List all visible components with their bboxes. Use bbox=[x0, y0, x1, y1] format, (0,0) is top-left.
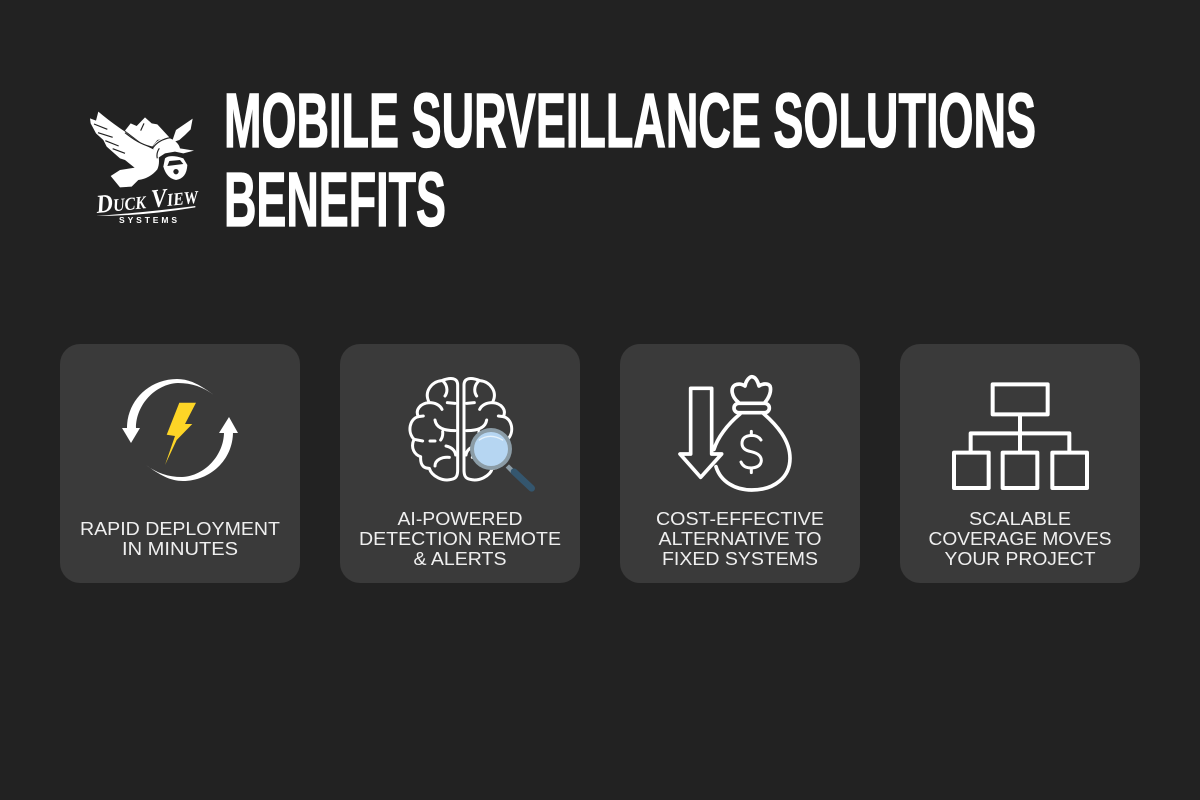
label: RAPID DEPLOYMENT bbox=[80, 518, 280, 539]
label: YOUR PROJECT bbox=[944, 548, 1096, 569]
icon: duck body bbox=[111, 150, 159, 187]
label: IN MINUTES bbox=[122, 538, 238, 559]
icon: hierarchy chart bbox=[954, 384, 1087, 488]
icon: duck right wing bbox=[172, 119, 193, 143]
label: & ALERTS bbox=[414, 548, 506, 569]
panel: cost-effective bbox=[620, 344, 860, 583]
title: BENEFITS bbox=[224, 157, 446, 243]
icon: duck left wing bbox=[90, 112, 153, 169]
icon: duck head bbox=[153, 138, 194, 158]
logo subtitle: SYSTEMS bbox=[119, 215, 177, 225]
panel: rapid deployment bbox=[60, 344, 300, 583]
icon: mountains bbox=[125, 117, 169, 147]
label bbox=[656, 508, 824, 569]
label: AI-POWERED bbox=[398, 508, 522, 529]
panel: scalable coverage bbox=[900, 344, 1140, 583]
label: FIXED SYSTEMS bbox=[662, 548, 818, 569]
label: COST-EFFECTIVE bbox=[656, 508, 824, 529]
label: DETECTION REMOTE bbox=[359, 528, 561, 549]
label bbox=[80, 518, 280, 559]
icon: down arrow and money bag bbox=[680, 377, 790, 490]
feather separations bbox=[94, 123, 170, 158]
label bbox=[359, 508, 561, 569]
label bbox=[928, 508, 1112, 569]
label: COVERAGE MOVES bbox=[928, 528, 1112, 549]
icon: camera dome bbox=[163, 156, 187, 180]
label: ALTERNATIVE TO bbox=[658, 528, 822, 549]
panel: AI-powered detection bbox=[340, 344, 580, 583]
title bbox=[224, 78, 1036, 243]
icon: logo swoosh bbox=[96, 206, 195, 216]
icon: circular arrows with lightning bolt bbox=[122, 379, 238, 481]
icon: brain with magnifier bbox=[410, 379, 532, 488]
logo: Duck View Systems bbox=[90, 112, 201, 225]
logo wordmark: Duck View bbox=[94, 180, 201, 219]
label: SCALABLE bbox=[969, 508, 1071, 529]
